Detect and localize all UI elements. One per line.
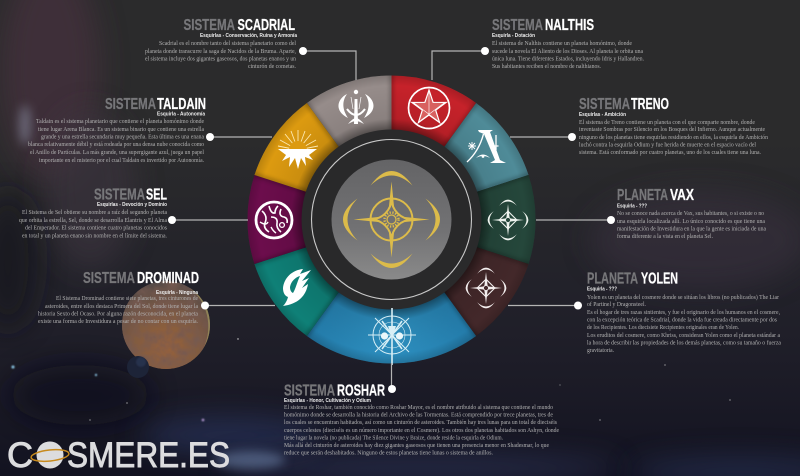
text panel: Sistema Roshar: Más allá del cinturón de asteroides hay diez gigantes gaseosos que tienen una presencia menor en Shadesmar, lo que <box>284 442 549 449</box>
text panel: Planeta Yolen: Esquirla - ??? <box>587 286 617 292</box>
text panel: Planeta Vax: No se conoce nada acerca de Vax, sus habitantes, o si existe o no <box>617 210 765 217</box>
connector: Nalthis <box>432 47 489 80</box>
text panel: Sistema Sel: en total y un planeta enano sin nombre en el límite del sistema. <box>22 232 167 240</box>
text panel: Sistema Sel: que orbita la estrella, Sel, donde se desarrolla Elantris y El Alma <box>19 217 167 224</box>
icon: Sel <box>256 202 292 238</box>
text panel: Sistema Scadrial: el sistema incluye dos gigantes gaseosos, dos planetas enanos y un <box>145 56 297 62</box>
text panel: Sistema Scadrial <box>145 17 298 70</box>
text panel: Sistema Taldain: tiene lugar Arena Blanca. Es un sistema binario que contiene una estrella <box>38 126 204 133</box>
text panel: Planeta Yolen: de los Recipientes. Los diecisiete Recipientes originales eran de Yolen. <box>587 324 739 331</box>
connector: Vax <box>536 216 615 224</box>
text panel: Sistema Nalthis: El sistema de Nalthis contiene un planeta homónimo, donde <box>492 40 632 47</box>
text panel: Sistema Nalthis: Sus habitantes reciben el nombre de nalthianos. <box>492 63 601 70</box>
text panel: Sistema Roshar: los cuales se encuentran habitados, así como un cinturón de asteroides. También hay tres lunas para un total de dieciséis <box>284 419 557 426</box>
text panel: Sistema Scadrial: planeta donde transcurre la saga de Nacidos de la Bruma. Aparte, <box>145 48 296 55</box>
icon: central gold cosmere symbol <box>343 171 440 268</box>
text panel: Sistema Sel: SISTEMA <box>94 186 145 204</box>
text panel: Planeta Yolen: of Partinel y Dragonsteel. <box>587 301 646 308</box>
text panel: Planeta Vax: Esquirla - ??? <box>617 204 647 210</box>
connector: Scadrial <box>299 47 356 80</box>
text panel: Planeta Vax: VAX <box>670 187 695 204</box>
text panel: Planeta Yolen: PLANETA <box>587 270 638 288</box>
text panel: Sistema Drominad: existe una forma de Investidura a pesar de no contar con un esquirla. <box>38 318 198 325</box>
text panel: Sistema Treno: luchó contra la esquirla Odium y fue herida de muerte en el espacio vacío del <box>579 142 756 148</box>
text panel: Sistema Sel: El Sistema de Sel obtiene su nombre a raíz del segundo planeta <box>22 209 167 216</box>
text panel: Sistema Drominad <box>38 270 199 325</box>
text panel: Sistema Roshar: tiene lugar la novela (no publicada) The Silence Divine y Braize, donde reside la esquirla de Odium. <box>284 434 503 442</box>
text panel: Sistema Taldain: importante en el misterio por el cual Taldain es invertido por Autonomía. <box>39 157 204 164</box>
text panel: Sistema Drominad: DROMINAD <box>137 270 199 287</box>
segment: Yolen <box>392 220 528 336</box>
icon: Taldain sun <box>278 130 318 169</box>
logo: COSMERE.ES: O <box>36 436 63 475</box>
text panel: Sistema Taldain: SISTEMA <box>105 96 156 113</box>
text panel: Planeta Vax: PLANETA <box>617 187 668 204</box>
text panel: Sistema Treno: inventaste Sombras por Silencio en los Bosques del Infierno. Aunque actualmente <box>579 126 765 133</box>
segment: Drominad <box>254 220 392 336</box>
text panel: Sistema Scadrial: Scadrial es el nombre tanto del sistema planetario como del <box>159 40 296 47</box>
grey hub <box>332 160 452 280</box>
segment: Treno <box>392 103 528 220</box>
icon: Scadrial <box>338 90 374 124</box>
segment shading <box>248 70 536 364</box>
segment: Sel <box>247 175 392 264</box>
text panel: Sistema Nalthis: sucede la novela El Aliento de los Dioses. Al planeta le orbita una <box>492 48 643 55</box>
logo: COSMERE.ES: C <box>7 436 33 475</box>
text panel: Planeta Vax: forma diferente a la vista en el planeta Sel. <box>617 233 713 240</box>
text panel: Sistema Sel: Esquirlas - Devoción y Dominio <box>97 202 167 208</box>
segment: Vax <box>392 175 536 264</box>
text panel: Sistema Roshar: cuerpos celestes (dieciséis es un número importante en el Cosmere). Los otros dos planetas habitados son Ashyn, donde <box>284 427 559 434</box>
text panel: Planeta Vax <box>617 187 766 240</box>
text panel: Sistema Taldain: TALDAIN <box>157 96 206 113</box>
text panel: Sistema Nalthis: NALTHIS <box>545 17 594 34</box>
connector: Roshar <box>388 363 396 393</box>
text panel: Sistema Roshar: ROSHAR <box>337 382 385 400</box>
text panel: Sistema Drominad: Esquirla - Ninguna <box>156 290 199 296</box>
text panel: Sistema Roshar: reduce que serán deshabitados. Ninguno de estos planetas tiene lunas o sistema de anillos. <box>284 450 493 456</box>
text panel: Sistema Taldain: el Anillo de Partículas. La más grande, una supergigante azul, juega un papel <box>30 149 204 156</box>
text panel: Sistema Treno: SISTEMA <box>579 96 630 113</box>
connector: Drominad <box>201 302 275 310</box>
text panel: Sistema Taldain: Taldain es el sistema planetario que contiene el planeta homónimo donde <box>36 118 204 125</box>
segment: Taldain <box>254 103 392 220</box>
text panel: Sistema Roshar: homónimo donde se desarrolla la historia del Archivo de las Tormentas. Está comprendido por trece planetas, tres de <box>284 412 553 418</box>
text panel: Sistema Sel <box>19 186 167 240</box>
text panel: Sistema Treno: El sistema de Treno contiene un planeta con el que comparte nombre, donde <box>579 119 755 126</box>
text panel: Sistema Treno: ninguno de los planetas tiene esquirlas residiendo en ellos, la esquirla de Ambición <box>579 134 769 141</box>
text panel: Sistema Drominad: asteroides, entre ellos destaca Primera del Sol, donde tiene lugar la <box>45 303 198 310</box>
wheel of ten worlds <box>247 70 536 364</box>
icon: Roshar <box>368 308 416 365</box>
text panel: Sistema Taldain: blanca relativamente débil y está rodeada por una densa nube conocida como <box>28 141 205 148</box>
text panel: Sistema Roshar: SISTEMA <box>284 382 335 400</box>
text panel: Sistema Nalthis <box>492 17 644 70</box>
logo: COSMERE.ES: SMERE.ES <box>67 436 230 475</box>
text panel: Planeta Yolen: gravitatoria. <box>587 347 614 354</box>
text panel: Planeta Vax: manifestación de Investidura en la que la gente es iniciada de una <box>617 226 766 232</box>
text panel: Planeta Yolen: YOLEN <box>641 270 678 288</box>
connector: Sel <box>168 216 248 224</box>
text panel: Sistema Scadrial: Esquirlas - Conservación, Ruina y Armonía <box>200 33 298 39</box>
segment: Nalthis <box>392 76 476 220</box>
icon: Vax <box>488 200 528 240</box>
segment: Scadrial <box>307 76 392 220</box>
text panel: Sistema Sel: SEL <box>146 186 167 204</box>
connector: Taldain <box>206 133 272 141</box>
text panel: Sistema Drominad: El Sistema Drominad contiene siete planetas, tres cinturones de <box>56 295 198 302</box>
text panel: Sistema Scadrial: SCADRIAL <box>238 17 295 34</box>
connector: Yolen <box>508 302 582 310</box>
text panel: Sistema Drominad: historia Sexto del Ocaso. Por alguna razón desconocida, en el planeta <box>38 310 198 318</box>
text panel: Sistema Treno <box>579 96 769 156</box>
text panel: Sistema Taldain: Esquirla - Autonomía <box>157 112 206 118</box>
text panel: Sistema Drominad: SISTEMA <box>83 270 135 287</box>
white ring <box>312 140 472 300</box>
text panel: Sistema Roshar <box>284 382 559 456</box>
text panel: Planeta Yolen <box>587 270 781 354</box>
icon: Nalthis <box>408 88 450 128</box>
icon: Treno <box>467 130 506 163</box>
text panel: Sistema Nalthis: Esquirla - Dotación <box>492 33 535 39</box>
text panel: Sistema Roshar: El sistema de Roshar, también conocido como Roshar Mayor, es el nombre atribuido al sistema que contiene el mundo <box>284 404 554 411</box>
planet Drominad with moon <box>122 281 210 378</box>
dark inner ring <box>302 130 482 310</box>
icon: Yolen <box>466 268 506 308</box>
text panel: Sistema Taldain: grande y una estrella secundaria muy pequeña. Esta última es una enana <box>41 134 204 140</box>
connector: Treno <box>510 133 576 141</box>
text panel: Sistema Nalthis: SISTEMA <box>492 17 543 34</box>
text panel: Sistema Sel: del Emperador. El sistema contiene cuatro planetas conocidos <box>25 224 167 232</box>
text panel: Sistema Treno: TRENO <box>631 96 669 113</box>
text panel: Sistema Treno: Esquirlas - Ambición <box>579 112 626 118</box>
text panel: Sistema Nalthis: única luna. Tiene diferentes Estados, incluyendo Idris y Hallandren. <box>492 56 644 62</box>
icon: Drominad flame <box>283 269 311 306</box>
text panel: Sistema Taldain <box>28 96 206 164</box>
text panel: Sistema Scadrial: cinturón de cometas. <box>248 63 296 70</box>
text panel: Sistema Scadrial: SISTEMA <box>184 17 235 34</box>
segment: Roshar <box>307 220 476 363</box>
text panel: Sistema Treno: sistema. Está conformado por cuatro planetas, uno de los cuales tiene una luna. <box>579 149 761 156</box>
text panel: Planeta Vax: una esquirla localizada allí. Lo único conocido es que tiene una <box>617 218 765 225</box>
logo: COSMERE.ES <box>7 436 230 475</box>
text panel: Sistema Roshar: Esquirlas - Honor, Cultivación y Odium <box>284 398 371 404</box>
